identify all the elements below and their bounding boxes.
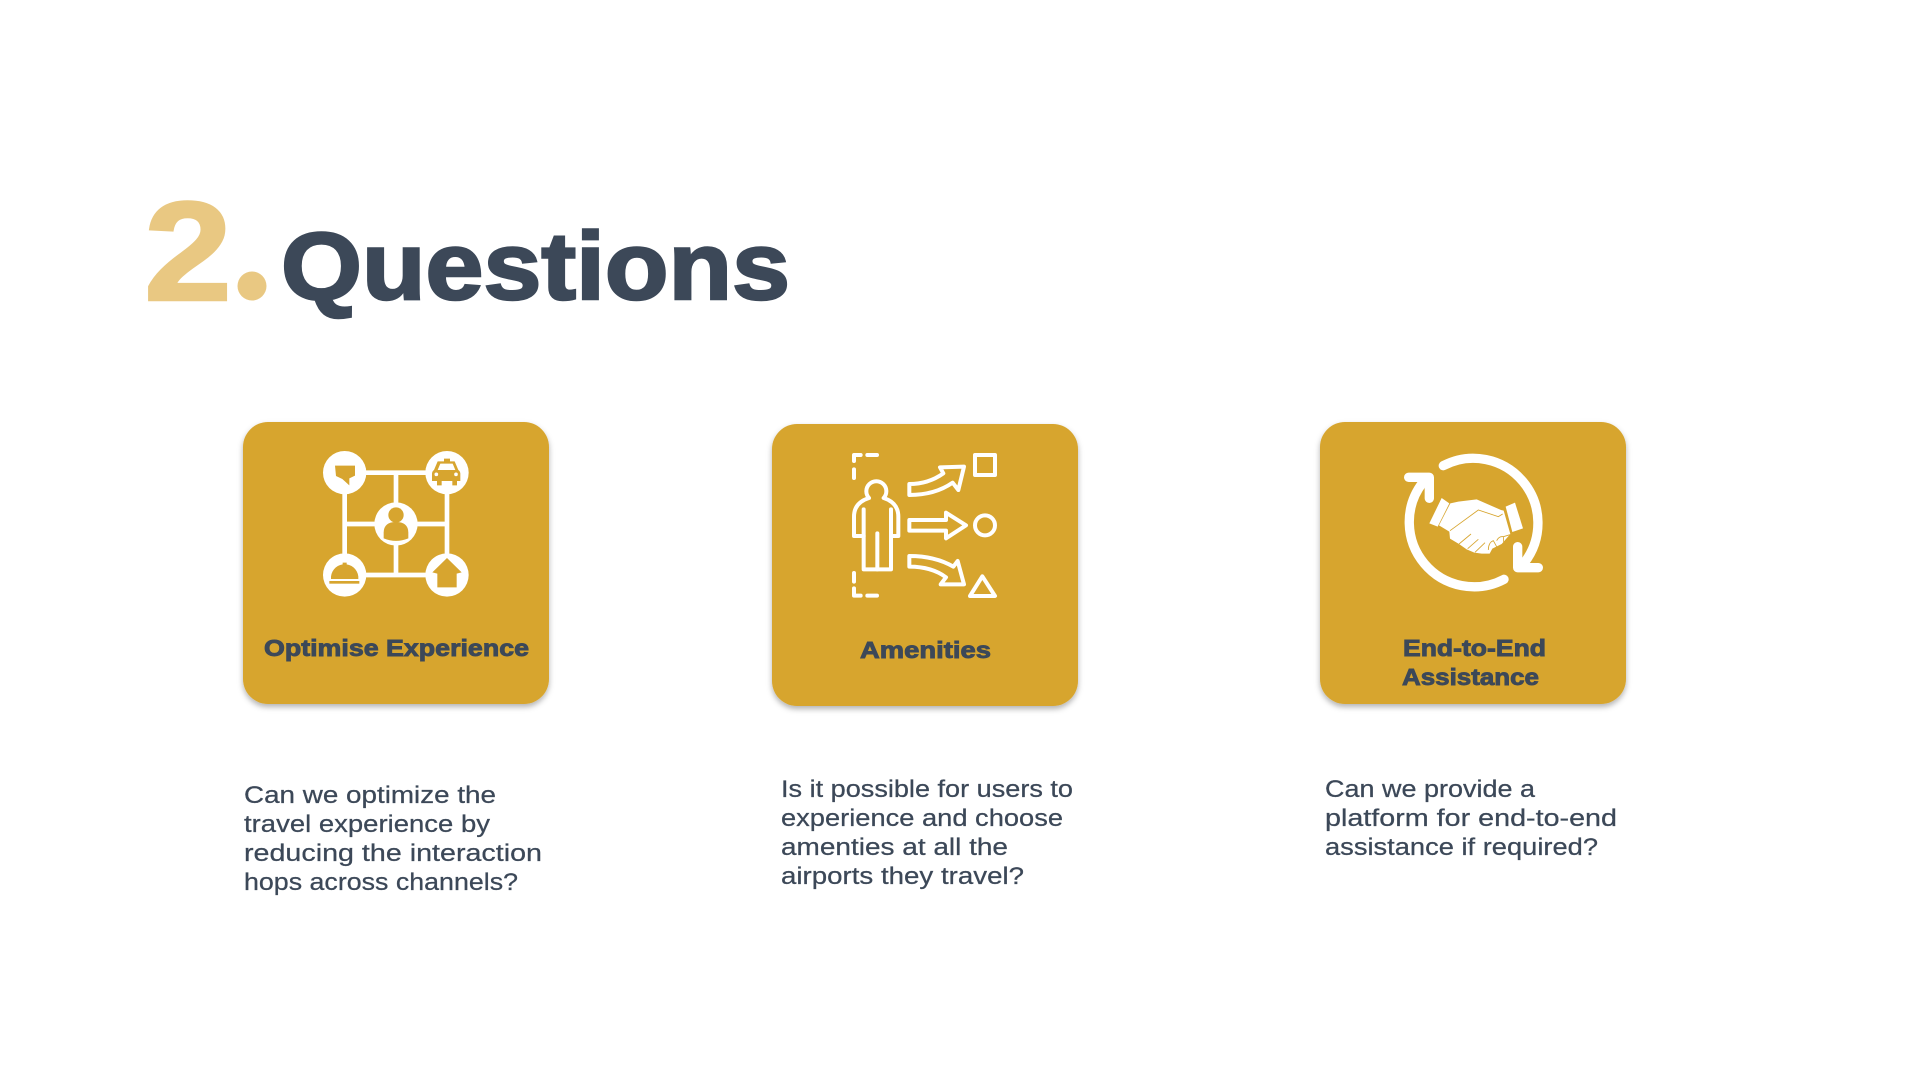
text block: assistance question: assistance if required? xyxy=(1325,834,1598,861)
panel: optimise experience xyxy=(243,422,549,704)
card label: Optimise Experience xyxy=(264,635,529,661)
text block: optimise question: Can we optimize the xyxy=(244,782,496,809)
card background xyxy=(772,424,1078,706)
title xyxy=(144,172,790,330)
text block: assistance question: platform for end-to-end xyxy=(1325,805,1617,832)
section number: 2 xyxy=(144,172,232,330)
card background xyxy=(1320,422,1626,704)
text block: optimise question: reducing the interaction xyxy=(244,840,542,867)
card label: Amenities xyxy=(860,637,991,663)
text block: optimise question: travel experience by xyxy=(244,811,491,838)
text block: amenities question: amenties at all the xyxy=(781,834,1008,861)
text block: assistance question: Can we provide a xyxy=(1325,776,1535,803)
icon: person choosing options xyxy=(854,455,995,596)
card background xyxy=(243,422,549,704)
text block: optimise question: hops across channels? xyxy=(244,869,518,896)
text block: optimise question xyxy=(244,782,542,896)
text block: amenities question: airports they travel? xyxy=(781,863,1024,890)
text block: amenities question: experience and choose xyxy=(781,805,1063,832)
heading: Questions xyxy=(281,213,790,320)
text block: amenities question xyxy=(781,776,1073,890)
section number xyxy=(144,172,266,330)
card label: Assistance xyxy=(1402,664,1539,690)
icon: handshake with cycle arrows xyxy=(1409,458,1538,587)
card label: End-to-End xyxy=(1403,635,1546,661)
icon: connected travel network xyxy=(323,451,469,597)
panel: amenities xyxy=(772,424,1078,706)
panel: end-to-end assistance xyxy=(1320,422,1626,704)
text block: amenities question: Is it possible for users to xyxy=(781,776,1073,803)
card label xyxy=(1402,635,1546,690)
text block: assistance question xyxy=(1325,776,1617,861)
